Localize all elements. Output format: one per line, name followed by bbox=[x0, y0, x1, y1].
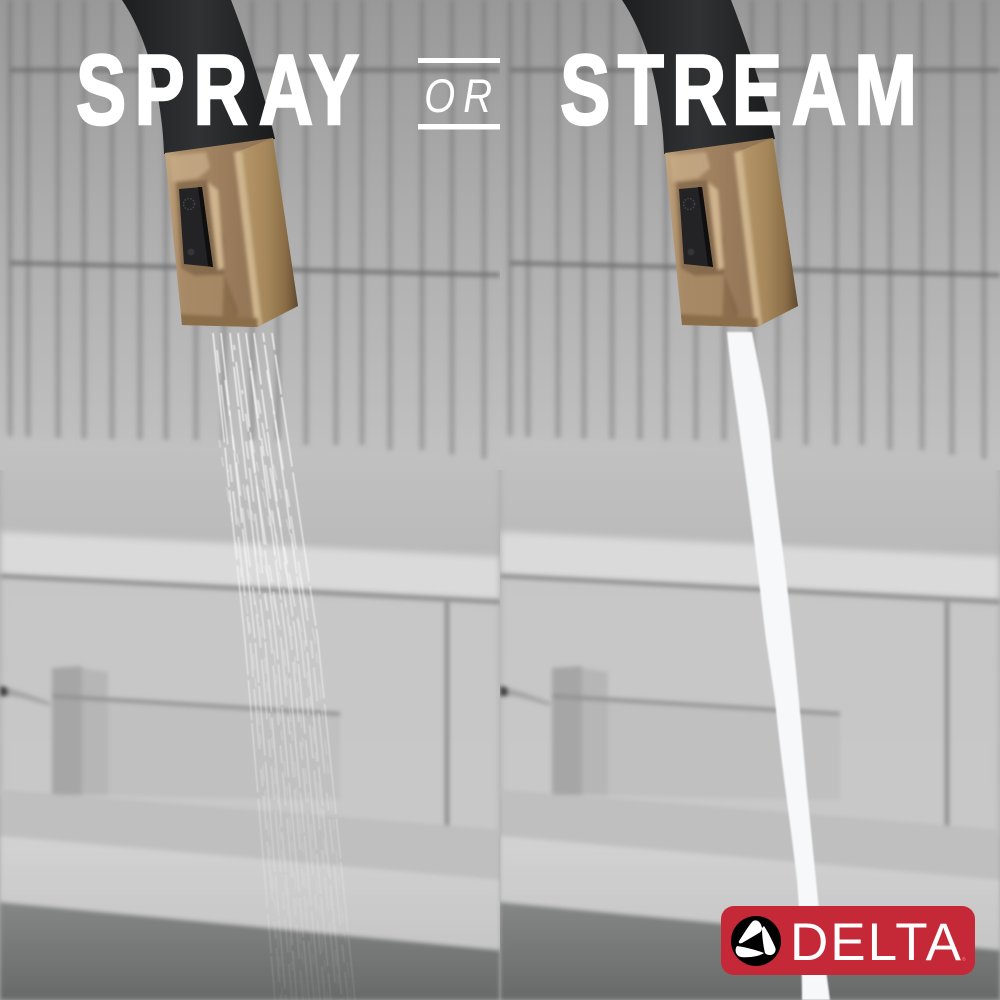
title word: SPRAY: SPRAY bbox=[76, 34, 359, 145]
logo badge: Delta: ® bbox=[962, 956, 966, 963]
faucet head: right, brushed gold sprayer with button bbox=[665, 138, 798, 328]
background: right panel kitchen scene bbox=[500, 0, 1000, 1000]
logo icon: triangle mark bbox=[731, 916, 781, 966]
divider word: OR with rules bbox=[418, 58, 500, 130]
title word: STREAM: STREAM bbox=[560, 34, 917, 145]
spray water streaks bbox=[213, 333, 355, 1000]
faucet head: left, brushed gold sprayer with button bbox=[165, 138, 298, 328]
stream of water bbox=[727, 332, 830, 1000]
faucet hose: left bbox=[122, 0, 275, 154]
background: left panel kitchen scene bbox=[0, 0, 500, 1000]
logo badge: Delta bbox=[721, 906, 975, 975]
logo badge: Delta: DELTA bbox=[790, 913, 962, 972]
faucet hose: right bbox=[622, 0, 775, 154]
divider word: OR with rules: OR bbox=[424, 71, 492, 123]
